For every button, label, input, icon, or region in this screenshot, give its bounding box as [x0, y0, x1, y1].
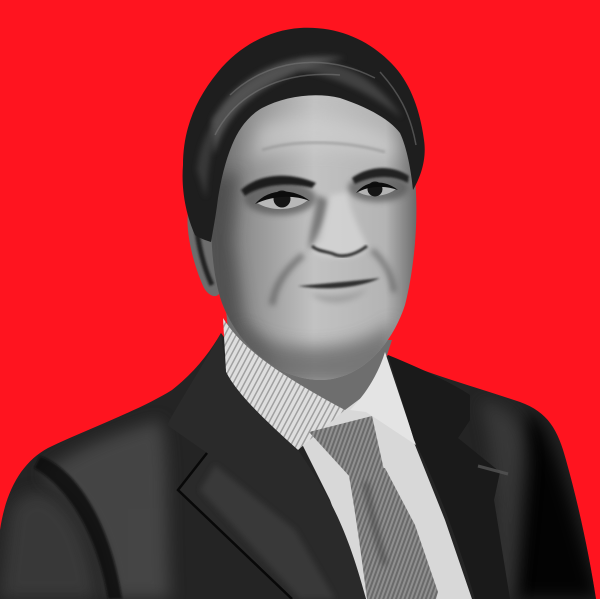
left eye socket	[244, 181, 316, 215]
tie blade	[349, 468, 438, 599]
right eye	[356, 182, 398, 196]
right eye socket	[348, 174, 408, 202]
nose side shadow	[309, 195, 328, 250]
suit sleeve seam	[34, 456, 122, 599]
suit highlight: left sleeve	[0, 493, 97, 599]
suit jacket	[0, 333, 600, 599]
left lapel	[167, 333, 366, 599]
suit highlight: left shoulder	[40, 420, 170, 599]
nasolabial fold right	[372, 250, 394, 292]
shirt front	[300, 380, 472, 599]
lapel highlight	[200, 465, 335, 599]
jaw shadow	[252, 318, 397, 380]
left face shadow	[212, 166, 269, 361]
suit shadow: right side	[510, 410, 600, 599]
hair strands	[215, 62, 416, 145]
suit highlight: right chest	[480, 400, 528, 599]
left eyebrow	[241, 176, 316, 196]
right lapel	[388, 355, 510, 599]
hair	[183, 28, 425, 242]
right eyebrow	[352, 168, 409, 184]
mouth	[298, 278, 380, 303]
lapel buttonhole	[478, 466, 508, 474]
necktie	[309, 416, 438, 599]
shirt collar: right	[350, 352, 416, 445]
forehead wrinkle	[262, 143, 385, 152]
left eye	[255, 190, 310, 209]
tie knot	[309, 416, 384, 477]
shirt collar: left	[223, 318, 345, 450]
lapel edge	[178, 453, 292, 599]
hair highlights	[212, 56, 345, 155]
ear	[187, 202, 222, 296]
nasolabial fold left	[272, 255, 303, 305]
neck	[225, 300, 392, 430]
forehead shading	[250, 117, 395, 160]
tie dimple	[366, 482, 385, 565]
nose	[311, 192, 367, 257]
face	[205, 85, 416, 385]
